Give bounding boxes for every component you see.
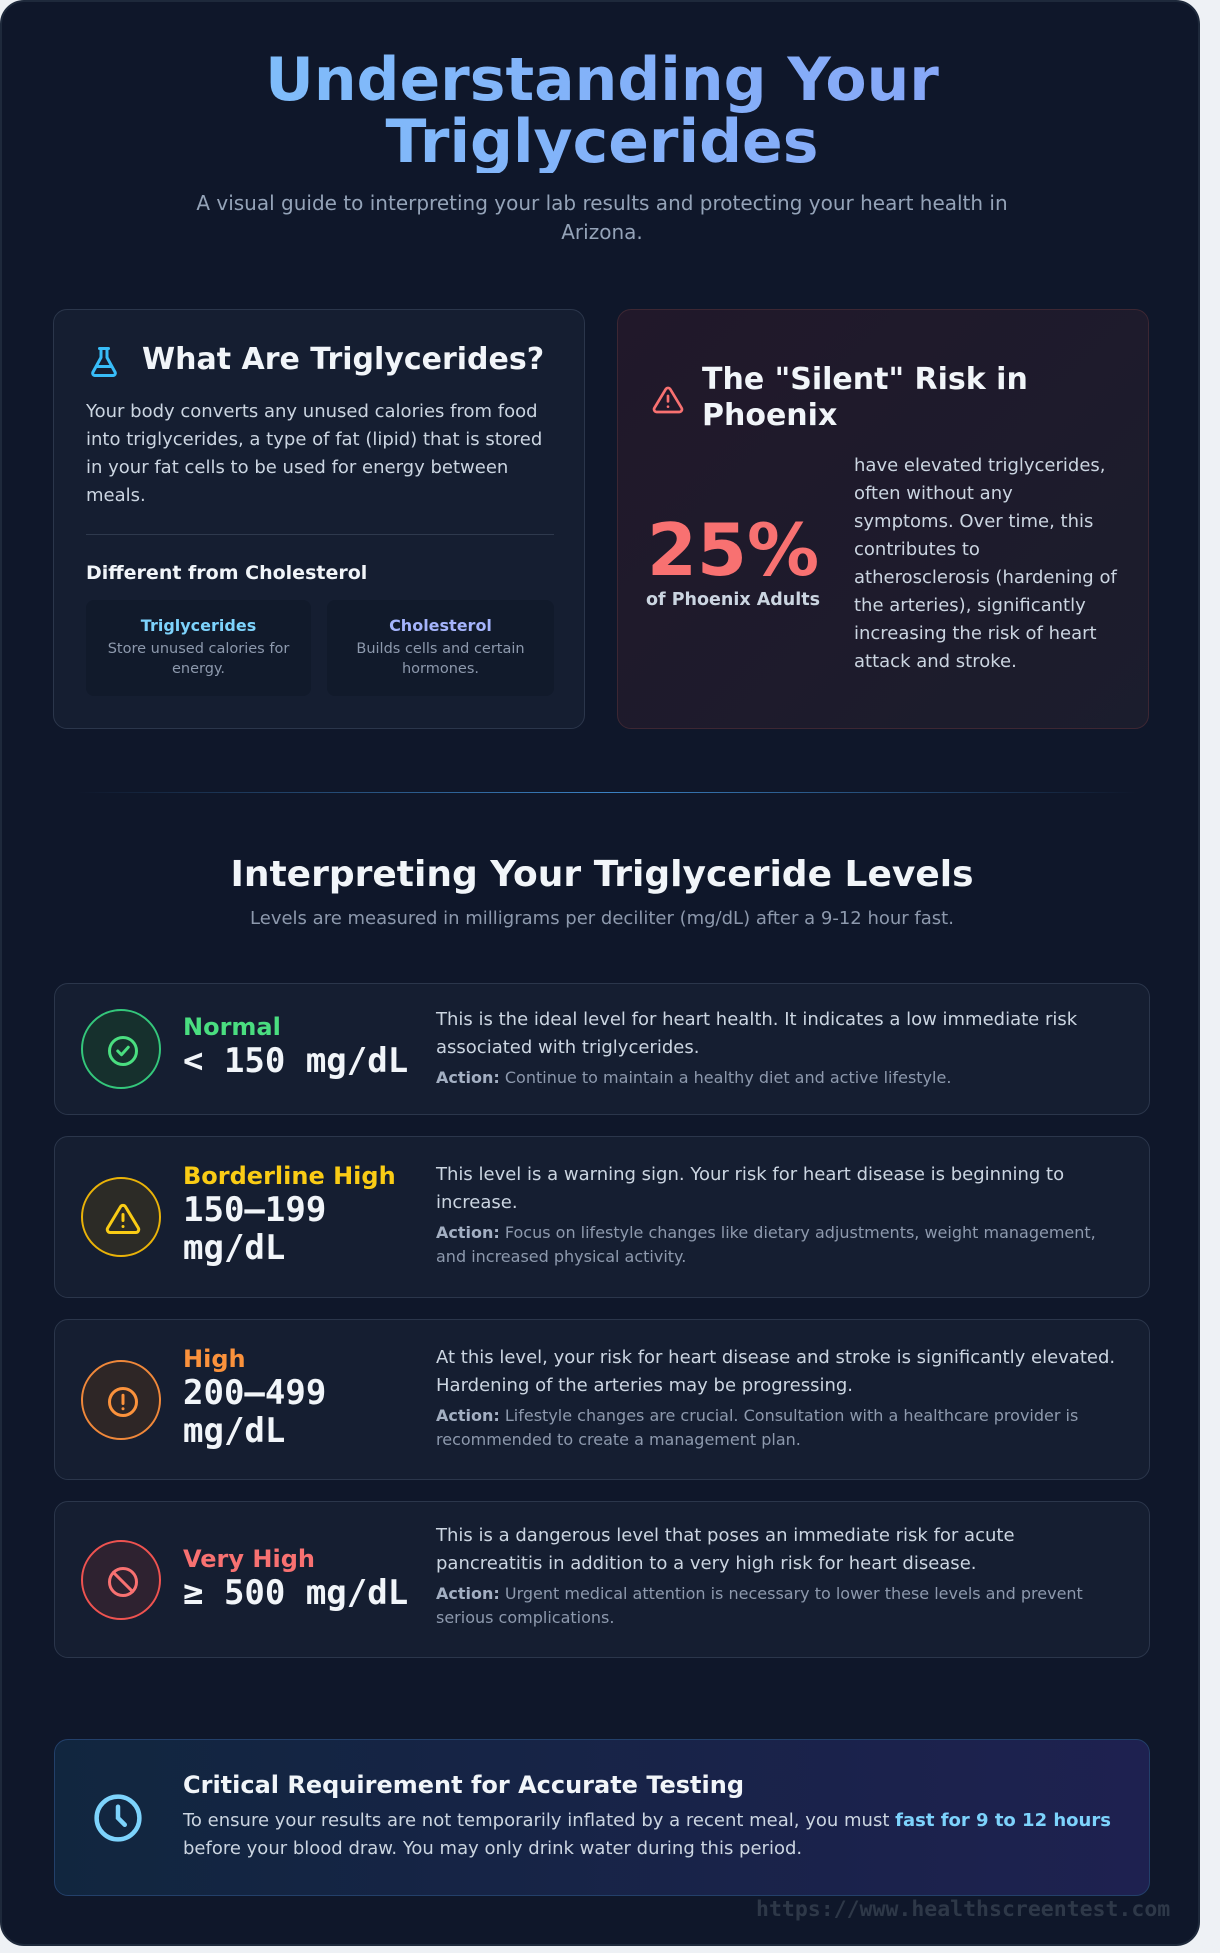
label: Very High — [183, 1545, 315, 1573]
comparison boxes — [108, 616, 525, 677]
stat description: increasing the risk of heart — [854, 623, 1097, 644]
description: Action: Focus on lifestyle changes like dietary adjustments, weight management, and increased physical activity. — [436, 1223, 1096, 1266]
callout: fasting requirement — [54, 1739, 1150, 1896]
description: At this level, your risk for heart disease and stroke is significantly elevated. Hardening of the arteries may be progressing. — [436, 1347, 1115, 1396]
watermark url: https://www.healthscreentest.com — [756, 1897, 1170, 1922]
stat: 25%: 25% — [647, 508, 819, 592]
body text: Your body converts any unused calories from food into triglycerides, a type of fat (lipid) that is stored in your fat cells to be used for energy between meals. — [86, 401, 542, 506]
label: mg/dL — [183, 1228, 285, 1268]
label: 150–199 — [183, 1190, 326, 1230]
icon: exclamation — [81, 1360, 161, 1440]
box: cholesterol — [327, 600, 554, 696]
stat description: have elevated triglycerides, — [854, 455, 1106, 476]
title: Understanding Your — [265, 45, 939, 115]
level card: very high — [54, 1501, 1150, 1658]
level card: normal — [54, 983, 1150, 1115]
level card: borderline high — [54, 1136, 1150, 1298]
icon: warning — [81, 1177, 161, 1257]
description — [436, 1009, 1077, 1087]
label: Borderline High — [183, 1162, 396, 1190]
stat description: attack and stroke. — [854, 651, 1017, 672]
box: cholesterol: Builds cells and certain hormones. — [356, 641, 525, 677]
stat description: atherosclerosis (hardening of — [854, 567, 1117, 588]
stat: 25%: of Phoenix Adults — [646, 590, 820, 610]
panel: silent risk — [617, 309, 1149, 729]
stat description: the arteries), significantly — [854, 595, 1086, 616]
description — [436, 1525, 1083, 1627]
description: This is a dangerous level that poses an immediate risk for acute pancreatitis in addition to a very high risk for heart disease. — [436, 1525, 1015, 1574]
icon: flask — [91, 347, 117, 377]
description: Action: Urgent medical attention is necessary to lower these levels and prevent serious complications. — [436, 1584, 1083, 1627]
subtitle: A visual guide to interpreting your lab results and protecting your heart health in Arizona. — [196, 191, 1008, 244]
box: cholesterol: Cholesterol — [389, 616, 492, 635]
label: ≥ 500 mg/dL — [183, 1573, 408, 1613]
title: Triglycerides — [386, 107, 818, 177]
section subtitle: Levels are measured in milligrams per deciliter (mg/dL) after a 9-12 hour fast. — [250, 908, 954, 929]
stat description — [854, 455, 1118, 672]
callout text: To ensure your results are not temporarily inflated by a recent meal, you must fast for 9 to 12 hours before your blood draw. You may only drink water during this period. — [183, 1810, 1111, 1859]
icon: ban — [81, 1540, 161, 1620]
description: Action: Lifestyle changes are crucial. Consultation with a healthcare provider is recommended to create a management plan. — [436, 1406, 1078, 1449]
stat description: often without any — [854, 483, 1013, 504]
box: triglycerides: Store unused calories for energy. — [108, 641, 289, 677]
stat description: symptoms. Over time, this — [854, 511, 1093, 532]
icon: warning — [652, 386, 684, 414]
description: Action: Continue to maintain a healthy diet and active lifestyle. — [436, 1068, 951, 1087]
label: High — [183, 1345, 246, 1373]
section heading: Interpreting Your Triglyceride Levels — [230, 854, 974, 895]
label — [183, 1013, 408, 1081]
level card: high — [54, 1319, 1150, 1480]
label: 200–499 — [183, 1373, 326, 1413]
subheading: Different from Cholesterol — [86, 562, 367, 584]
description — [436, 1164, 1096, 1266]
stat description: contributes to — [854, 539, 980, 560]
box: triglycerides: Triglycerides — [141, 616, 256, 635]
description: This level is a warning sign. Your risk for heart disease is beginning to increase. — [436, 1164, 1064, 1213]
title — [2, 49, 1202, 173]
label: Normal — [183, 1013, 281, 1041]
icon: check — [81, 1009, 161, 1089]
heading: The "Silent" Risk in Phoenix — [702, 362, 1028, 433]
box: triglycerides — [86, 600, 311, 696]
callout title: Critical Requirement for Accurate Testing — [183, 1771, 744, 1799]
heading: What Are Triglycerides? — [142, 342, 544, 377]
panel: what are triglycerides — [53, 309, 585, 729]
description: This is the ideal level for heart health. It indicates a low immediate risk associated with triglycerides. — [436, 1009, 1077, 1058]
label — [183, 1162, 396, 1268]
icon: clock — [94, 1794, 142, 1842]
label: mg/dL — [183, 1411, 285, 1451]
label — [183, 1545, 408, 1613]
label: < 150 mg/dL — [183, 1041, 408, 1081]
description — [436, 1347, 1115, 1449]
label — [183, 1345, 326, 1451]
